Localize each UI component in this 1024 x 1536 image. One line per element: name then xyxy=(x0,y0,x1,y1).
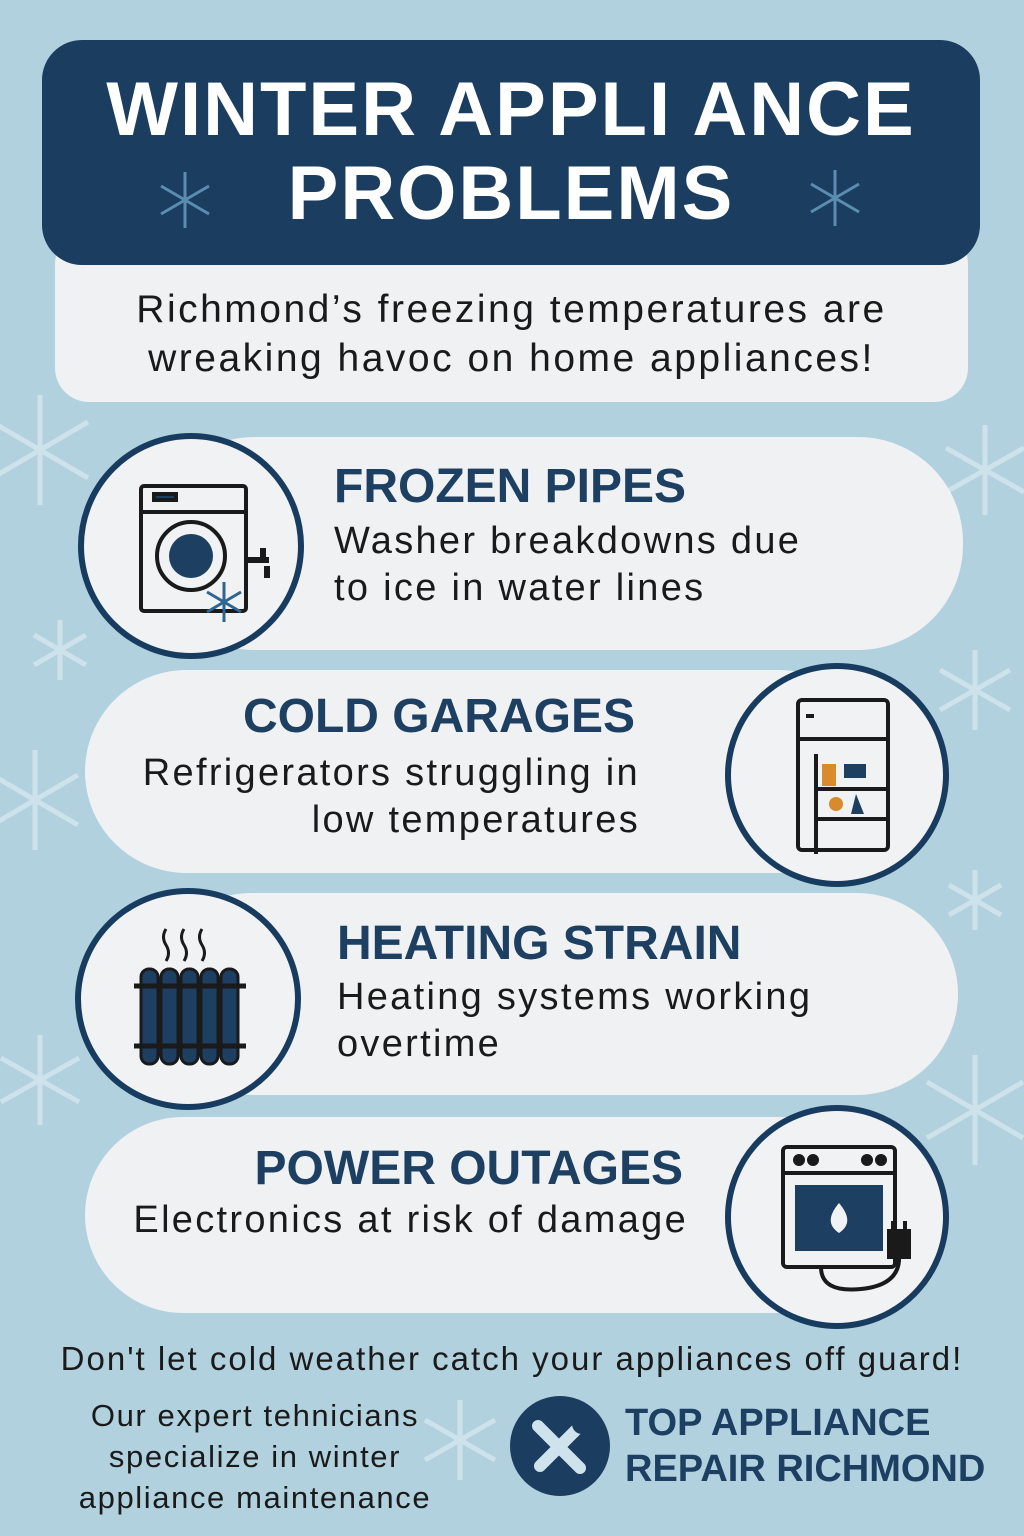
icon: radiator xyxy=(75,888,301,1110)
text: overtime xyxy=(337,1023,501,1065)
text xyxy=(334,520,801,609)
text xyxy=(337,976,812,1065)
title: WINTER APPLI ANCE xyxy=(106,67,916,152)
heading: POWER OUTAGES xyxy=(255,1142,683,1195)
text xyxy=(143,752,640,841)
icon: fridge xyxy=(725,663,949,887)
brand name xyxy=(625,1402,985,1490)
panel: frozen pipes xyxy=(78,433,963,659)
text: to ice in water lines xyxy=(334,567,705,609)
panel: cold garages xyxy=(85,663,949,887)
subtitle box: wreaking havoc on home appliances! xyxy=(148,337,875,380)
text: Electronics at risk of damage xyxy=(133,1199,688,1241)
panel: power outages xyxy=(85,1105,949,1329)
text: Heating systems working xyxy=(337,976,812,1018)
logo xyxy=(510,1396,985,1496)
heading: HEATING STRAIN xyxy=(337,917,741,970)
footer text: Our expert tehnicians xyxy=(91,1398,419,1433)
title: PROBLEMS xyxy=(288,151,734,236)
footer text: specialize in winter xyxy=(109,1439,401,1474)
subtitle box: Richmond’s freezing temperatures are xyxy=(136,288,887,331)
heading: COLD GARAGES xyxy=(243,690,635,743)
subtitle box xyxy=(55,230,968,402)
brand name: REPAIR RICHMOND xyxy=(625,1448,985,1490)
title xyxy=(42,40,980,265)
text: Refrigerators struggling in xyxy=(143,752,640,794)
icon: tools xyxy=(510,1396,610,1496)
heading: FROZEN PIPES xyxy=(334,460,686,513)
text: Washer breakdowns due xyxy=(334,520,801,562)
footer tagline: Don't let cold weather catch your appliances off guard! xyxy=(61,1340,963,1377)
panel: heating strain xyxy=(75,888,958,1110)
footer text: appliance maintenance xyxy=(79,1480,431,1515)
footer text xyxy=(79,1398,431,1515)
text: low temperatures xyxy=(312,799,640,841)
icon: oven with plug xyxy=(725,1105,949,1329)
brand name: TOP APPLIANCE xyxy=(625,1402,930,1444)
icon: washer xyxy=(78,433,304,659)
